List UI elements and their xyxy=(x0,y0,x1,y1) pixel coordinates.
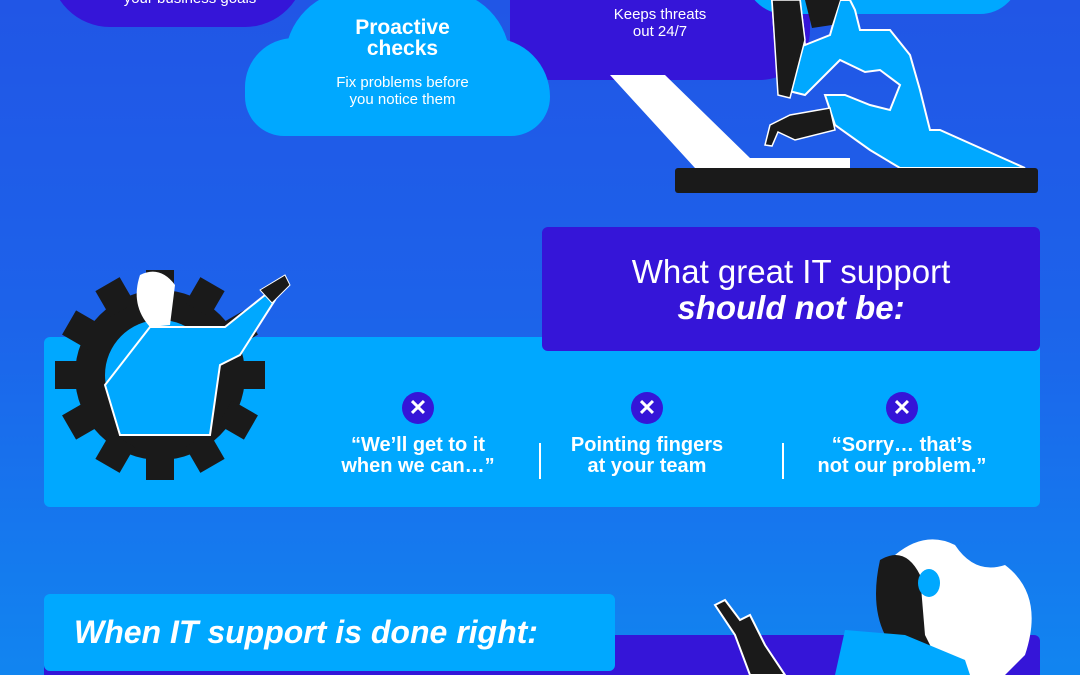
icon: x 1: ✕ xyxy=(409,395,427,420)
text: pointing fingers: Pointing fingers xyxy=(571,434,723,456)
panel: done right purple xyxy=(44,635,1040,675)
icon: x 2 xyxy=(631,392,663,424)
text: not our problem xyxy=(818,434,986,477)
heading box: should not be xyxy=(542,227,1040,351)
text: proactive checks body xyxy=(336,74,469,108)
text: pointing fingers xyxy=(571,434,723,477)
shape: top-left purple blob xyxy=(50,0,305,27)
text: proactive checks body: you notice them xyxy=(350,91,455,108)
text: get to it: when we can…” xyxy=(341,455,495,477)
text: get to it xyxy=(341,434,495,477)
icon: x 3 xyxy=(886,392,918,424)
icon: x 3: ✕ xyxy=(893,395,911,420)
text: keeps threats: out 24/7 xyxy=(633,23,687,40)
heading box: done right: When IT support is done right: xyxy=(74,614,538,650)
text: proactive checks heading: Proactive xyxy=(355,16,450,39)
text: pointing fingers: at your team xyxy=(588,455,706,477)
text: proactive checks body: Fix problems before xyxy=(336,74,469,91)
text: keeps threats: Keeps threats xyxy=(614,6,706,23)
heading box: should not be: What great IT support xyxy=(632,253,950,290)
icon: x 1 xyxy=(402,392,434,424)
text: keeps threats xyxy=(614,6,706,40)
shape: purple cloud top middle xyxy=(510,0,810,80)
illustration: gear and woman xyxy=(55,270,291,480)
illustration: man at laptop xyxy=(610,0,1038,193)
heading box: should not be: should not be: xyxy=(677,289,905,326)
panel: should not be xyxy=(44,337,1040,507)
shape: light cloud top right xyxy=(745,0,1020,14)
text: not our problem: not our problem.” xyxy=(818,455,986,477)
illustration: woman with headset xyxy=(714,539,1032,675)
cloud: proactive checks xyxy=(245,0,550,136)
text: proactive checks heading: checks xyxy=(367,37,438,60)
text: not our problem: “Sorry… that’s xyxy=(832,434,972,456)
text: proactive checks heading xyxy=(355,16,450,60)
heading box: done right xyxy=(44,594,615,671)
icon: x 2: ✕ xyxy=(638,395,656,420)
text: get to it: “We’ll get to it xyxy=(351,434,485,456)
